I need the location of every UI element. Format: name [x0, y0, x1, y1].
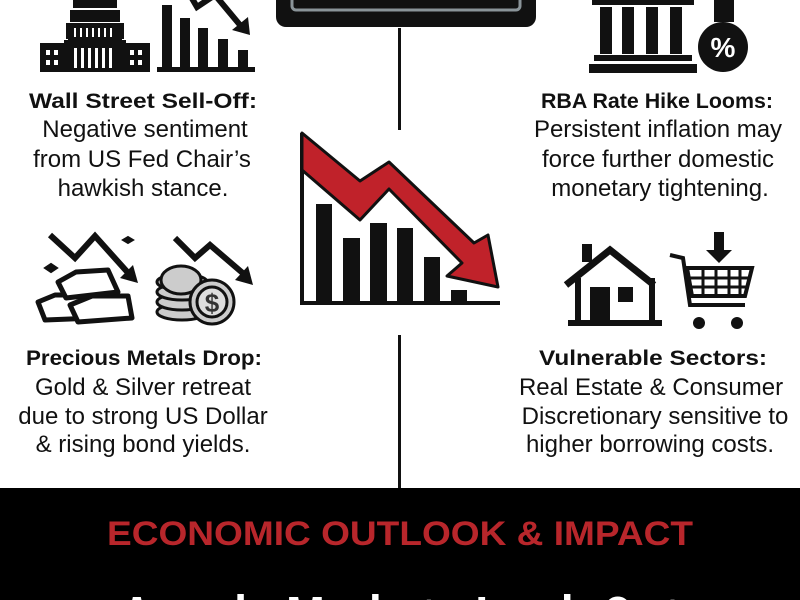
icon: percent coin [698, 0, 748, 72]
text: wall street: from US Fed Chair’s [33, 146, 251, 173]
text: wall street: Negative sentiment [42, 116, 248, 143]
text: precious metals: Precious Metals Drop: [26, 347, 262, 370]
text: precious metals: due to strong US Dollar [18, 403, 268, 430]
icon: percent coin: % [711, 32, 736, 63]
icon: coins: $ [205, 288, 220, 318]
text: vulnerable sectors: higher borrowing costs. [526, 431, 774, 458]
icon: bank building [589, 0, 697, 73]
icon: house [566, 244, 662, 326]
text: vulnerable sectors [519, 347, 788, 458]
icon: coins [157, 238, 253, 324]
connector line top [398, 28, 401, 130]
text: vulnerable sectors: Real Estate & Consumer [519, 374, 783, 401]
text: precious metals: & rising bond yields. [36, 431, 250, 458]
text: vulnerable sectors: Discretionary sensitive to [522, 403, 788, 430]
banner heading: ECONOMIC OUTLOOK & IMPACT [107, 515, 693, 553]
bottom banner [0, 488, 800, 600]
text: RBA [534, 90, 782, 202]
text: precious metals: Gold & Silver retreat [35, 374, 251, 401]
text: precious metals [18, 347, 268, 458]
icon: gold bars [38, 235, 138, 322]
connector line bottom [398, 335, 401, 488]
text: wall street: Wall Street Sell-Off: [29, 90, 257, 113]
icon: falling bar chart [157, 0, 255, 72]
central chart [302, 133, 500, 303]
text: wall street [29, 90, 257, 202]
text: wall street: hawkish stance. [58, 175, 228, 202]
text: RBA: RBA Rate Hike Looms: [541, 90, 773, 113]
top header box [276, 0, 536, 27]
text: RBA: Persistent inflation may [534, 116, 782, 143]
text: vulnerable sectors: Vulnerable Sectors: [539, 347, 767, 370]
icon: capitol building [40, 0, 150, 72]
icon: shopping cart [670, 232, 752, 329]
text: RBA: monetary tightening. [551, 175, 769, 202]
text: RBA: force further domestic [542, 146, 774, 173]
